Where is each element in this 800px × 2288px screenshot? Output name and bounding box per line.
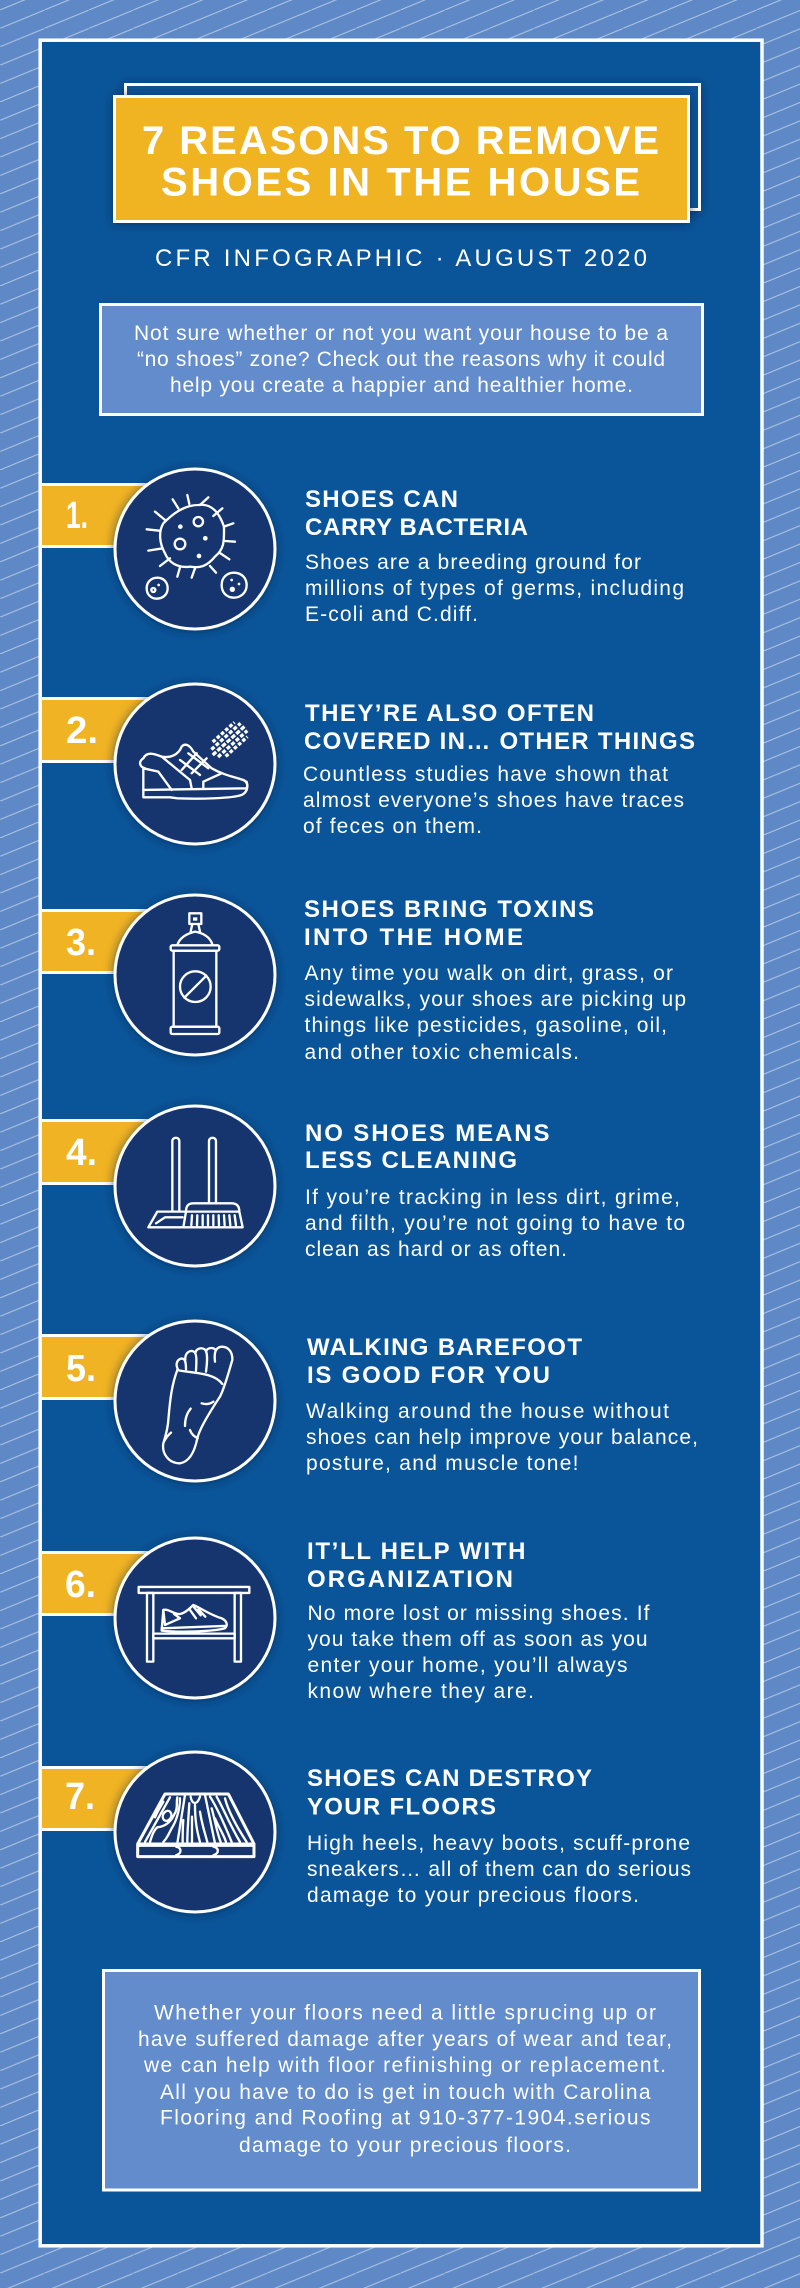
intro box: [100, 304, 702, 414]
text 5: posture, and muscle tone!: [306, 1452, 578, 1475]
text 2: of feces on them.: [303, 815, 482, 838]
text 6: you take them off as soon as you: [308, 1628, 648, 1651]
text 4: NO SHOES MEANS: [305, 1120, 550, 1147]
title block: 7 REASONS TO REMOVE: [142, 119, 659, 163]
closing box: All you have to do is get in touch with Carolina: [160, 2081, 651, 2104]
number band 7: 7.: [65, 1776, 95, 1818]
circle icon: shoe and sole print: [115, 684, 275, 844]
text 7: damage to your precious floors.: [307, 1884, 639, 1907]
text 6: ORGANIZATION: [307, 1566, 513, 1593]
text 3: Any time you walk on dirt, grass, or: [304, 962, 673, 985]
text 7: High heels, heavy boots, scuff-prone: [307, 1832, 690, 1855]
text 6: No more lost or missing shoes. If: [308, 1602, 650, 1625]
item 4: [42, 1106, 685, 1266]
number band 2: [42, 697, 172, 763]
closing box: Whether your floors need a little sprucing up or: [154, 2002, 656, 2024]
circle icon: wood floor planks: [115, 1752, 275, 1912]
number band 2: 2.: [66, 710, 98, 752]
number band 6: [42, 1551, 172, 1616]
text 3: sidewalks, your shoes are picking up: [304, 988, 686, 1011]
title block: [114, 84, 700, 222]
text 6: know where they are.: [308, 1680, 534, 1703]
text 1: Shoes are a breeding ground for: [305, 551, 641, 574]
text 2: almost everyone’s shoes have traces: [303, 789, 684, 812]
text 7: sneakers… all of them can do serious: [307, 1858, 691, 1881]
circle icon: bare foot: [115, 1321, 275, 1481]
text 2: Countless studies have shown that: [303, 763, 668, 786]
number band 5: 5.: [66, 1348, 96, 1390]
item 1: [42, 469, 684, 629]
item 2: [42, 684, 695, 844]
number band 4: [42, 1119, 172, 1185]
text 7: SHOES CAN DESTROY: [307, 1765, 592, 1792]
number band 1: 1.: [66, 495, 88, 537]
text 3: and other toxic chemicals.: [304, 1041, 579, 1064]
item 5: [42, 1321, 698, 1481]
closing box: damage to your precious floors.: [239, 2134, 571, 2157]
title block: SHOES IN THE HOUSE: [161, 160, 640, 204]
circle icon: bacteria: [115, 469, 275, 629]
subtitle: CFR INFOGRAPHIC · AUGUST 2020: [155, 245, 647, 272]
text 5: shoes can help improve your balance,: [306, 1426, 698, 1449]
item 3: [42, 895, 686, 1064]
intro box: “no shoes” zone? Check out the reasons why it could: [137, 348, 665, 371]
text 1: CARRY BACTERIA: [305, 514, 528, 541]
intro box: help you create a happier and healthier home.: [170, 374, 633, 397]
item 6: [42, 1538, 650, 1703]
text 1: [305, 486, 684, 626]
number band 1: [42, 483, 172, 548]
text 6: IT’LL HELP WITH: [307, 1538, 526, 1565]
number band 3: [42, 909, 172, 974]
text 2: COVERED IN… OTHER THINGS: [304, 728, 695, 755]
text 7: [307, 1765, 691, 1907]
text 2: [303, 700, 695, 838]
text 7: YOUR FLOORS: [307, 1794, 496, 1820]
text 6: [307, 1538, 650, 1703]
text 4: clean as hard or as often.: [305, 1238, 567, 1261]
circle icon: spray can: [115, 895, 275, 1055]
text 5: IS GOOD FOR YOU: [307, 1362, 550, 1389]
circle icon: broom and dustpan: [115, 1106, 275, 1266]
intro box: Not sure whether or not you want your house to be a: [134, 322, 668, 345]
text 1: E-coli and C.diff.: [305, 603, 478, 626]
text 4: [305, 1120, 685, 1261]
number band 3: 3.: [66, 922, 96, 964]
number band 5: [42, 1334, 172, 1400]
number band 4: 4.: [66, 1132, 97, 1174]
closing box: [104, 1970, 700, 2190]
closing box: we can help with floor refinishing or replacement.: [143, 2054, 666, 2077]
text 4: If you’re tracking in less dirt, grime,: [305, 1186, 680, 1209]
text 5: [306, 1334, 698, 1475]
item 7: [42, 1752, 691, 1912]
text 3: INTO THE HOME: [304, 924, 523, 951]
text 6: enter your home, you’ll always: [308, 1654, 628, 1677]
circle icon: shoe rack: [115, 1538, 275, 1698]
text 2: THEY’RE ALSO OFTEN: [305, 700, 594, 727]
text 4: LESS CLEANING: [305, 1147, 517, 1174]
text 3: things like pesticides, gasoline, oil,: [304, 1014, 667, 1037]
number band 7: [42, 1766, 172, 1831]
text 5: WALKING BAREFOOT: [307, 1334, 582, 1361]
number band 6: 6.: [65, 1564, 96, 1606]
text 1: millions of types of germs, including: [305, 577, 684, 600]
text 3: [304, 896, 686, 1064]
text 1: SHOES CAN: [305, 486, 458, 513]
closing box: have suffered damage after years of wear and tear,: [138, 2028, 672, 2051]
closing box: Flooring and Roofing at 910-377-1904.serious: [160, 2106, 650, 2130]
text 3: SHOES BRING TOXINS: [304, 896, 594, 923]
text 5: Walking around the house without: [306, 1400, 669, 1423]
text 4: and filth, you’re not going to have to: [305, 1212, 685, 1235]
